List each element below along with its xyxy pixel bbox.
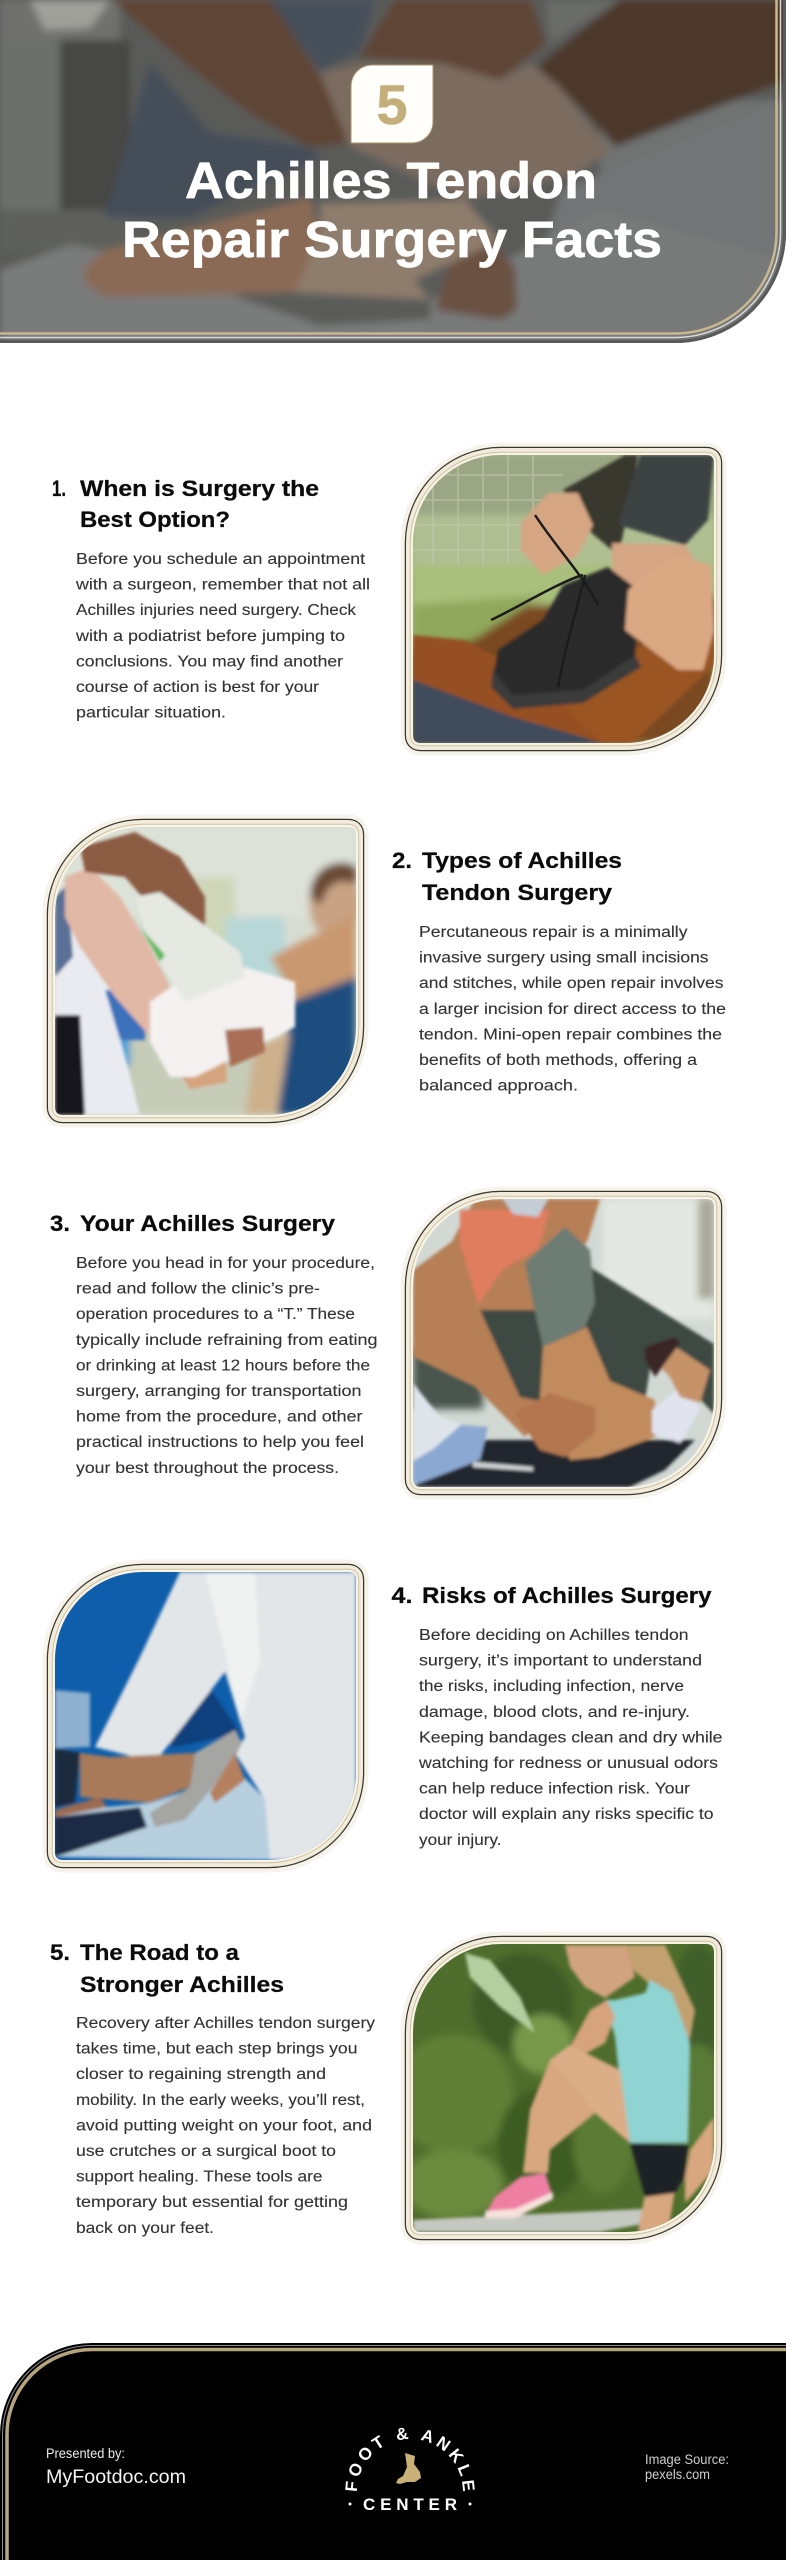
body text 5: mobility. In the early weeks, you’ll rest, <box>76 2092 365 2109</box>
body text 3: surgery, arranging for transportation <box>76 1383 362 1400</box>
heading 5: 5. <box>50 1940 70 1965</box>
icon: gold foot <box>396 2453 421 2484</box>
presented by: Presented by: <box>46 2446 125 2461</box>
body text 3: practical instructions to help you feel <box>76 1434 364 1451</box>
body text 5: closer to regaining strength and <box>76 2066 326 2083</box>
body text 3: your best throughout the process. <box>76 1460 339 1477</box>
presented by: MyFootdoc.com <box>46 2467 186 2488</box>
body text 5: avoid putting weight on your foot, and <box>76 2117 372 2134</box>
heading 4: 4. <box>392 1583 412 1608</box>
body text 1: with a podiatrist before jumping to <box>75 628 345 645</box>
heading 1: Best Option? <box>80 507 230 532</box>
heading 3: 3. <box>50 1211 70 1236</box>
photo 1: tying running shoe <box>413 455 714 743</box>
body text 5: support healing. These tools are <box>76 2169 322 2186</box>
body text 1: particular situation. <box>76 705 226 722</box>
logo: foot and ankle center: CENTER <box>363 2495 457 2514</box>
image source: pexels.com <box>645 2467 710 2482</box>
body text 2: a larger incision for direct access to the <box>419 1001 726 1018</box>
header border lines <box>0 0 784 342</box>
body text 3: or drinking at least 12 hours before the <box>76 1357 370 1374</box>
body text 2: invasive surgery using small incisions <box>419 950 709 967</box>
body text 1: Before you schedule an appointment <box>76 551 366 568</box>
panel: section 3 <box>50 1199 714 1487</box>
body text 4: Keeping bandages clean and dry while <box>419 1729 722 1746</box>
panel: section 2 <box>55 827 726 1115</box>
header photo: bandaged ankle <box>0 0 786 343</box>
body text 2: tendon. Mini-open repair combines the <box>419 1026 722 1043</box>
panel: section 4 <box>55 1572 722 1860</box>
heading 1 <box>52 476 319 532</box>
body text 4: Before deciding on Achilles tendon <box>419 1627 688 1644</box>
heading 1: When is Surgery the <box>80 476 319 501</box>
heading 2 <box>392 848 622 905</box>
heading 2: Tendon Surgery <box>422 880 613 905</box>
body text 3: typically include refraining from eating <box>76 1332 378 1349</box>
badge: number 5: 5 <box>376 73 408 136</box>
body text 4: doctor will explain any risks specific to <box>419 1806 714 1823</box>
heading 5: The Road to a <box>80 1940 240 1965</box>
heading 2: 2. <box>392 848 412 873</box>
body text 2: and stitches, while open repair involves <box>419 975 724 992</box>
body text 5 <box>76 2015 375 2237</box>
panel: section 1 <box>52 455 714 743</box>
body text 1: Achilles injuries need surgery. Check <box>76 602 356 619</box>
title <box>122 152 662 268</box>
body text 2: Percutaneous repair is a minimally <box>419 924 688 941</box>
body text 5: Recovery after Achilles tendon surgery <box>76 2015 375 2032</box>
photo 4: doctor examining ankle <box>55 1572 356 1860</box>
body text 3: read and follow the clinic’s pre- <box>76 1281 320 1298</box>
body text 3: home from the procedure, and other <box>76 1409 362 1426</box>
heading 2: Types of Achilles <box>422 848 622 873</box>
panel: section 5 <box>50 1940 723 2237</box>
body text 2 <box>419 924 726 1095</box>
heading 1: 1. <box>52 476 66 501</box>
header banner <box>0 0 786 343</box>
body text 1: conclusions. You may find another <box>76 653 343 670</box>
image source <box>645 2452 729 2482</box>
body text 4: your injury. <box>419 1832 502 1849</box>
body text 5: back on your feet. <box>76 2220 214 2237</box>
image source: Image Source: <box>645 2452 729 2467</box>
body text 4: can help reduce infection risk. Your <box>419 1781 690 1798</box>
heading 5: Stronger Achilles <box>80 1972 284 1997</box>
photo 2: bandaging a foot <box>55 827 361 1115</box>
title: Repair Surgery Facts <box>122 211 662 268</box>
body text 5: takes time, but each step brings you <box>76 2041 358 2058</box>
body text 1 <box>75 551 370 722</box>
body text 5: use crutches or a surgical boot to <box>76 2143 336 2160</box>
photo 5: woman stretching outdoors <box>393 1944 723 2232</box>
logo: foot and ankle center <box>345 2428 475 2514</box>
footer border lines <box>2 2346 786 2560</box>
title: Achilles Tendon <box>185 152 597 209</box>
body text 4: watching for redness or unusual odors <box>418 1755 718 1772</box>
heading 4: Risks of Achilles Surgery <box>422 1583 712 1608</box>
body text 1: with a surgeon, remember that not all <box>75 577 370 594</box>
body text 4: the risks, including infection, nerve <box>419 1678 684 1695</box>
body text 3 <box>76 1255 378 1477</box>
body text 2: benefits of both methods, offering a <box>419 1052 697 1069</box>
body text 4 <box>418 1627 722 1849</box>
footer <box>0 2343 786 2560</box>
heading 3: Your Achilles Surgery <box>80 1211 336 1236</box>
body text 1: course of action is best for your <box>76 679 319 696</box>
badge: number 5 <box>351 65 433 143</box>
heading 5 <box>50 1940 284 1997</box>
presented by <box>46 2446 186 2488</box>
photo 3: holding ankle on a mat <box>413 1199 714 1487</box>
body text 4: surgery, it’s important to understand <box>419 1653 702 1670</box>
body text 5: temporary but essential for getting <box>76 2194 348 2211</box>
body text 4: damage, blood clots, and re-injury. <box>419 1704 690 1721</box>
body text 3: Before you head in for your procedure, <box>76 1255 375 1272</box>
body text 2: balanced approach. <box>419 1078 578 1095</box>
body text 3: operation procedures to a “T.” These <box>76 1306 355 1323</box>
logo: foot and ankle center: FOOT & ANKLE <box>345 2428 475 2492</box>
